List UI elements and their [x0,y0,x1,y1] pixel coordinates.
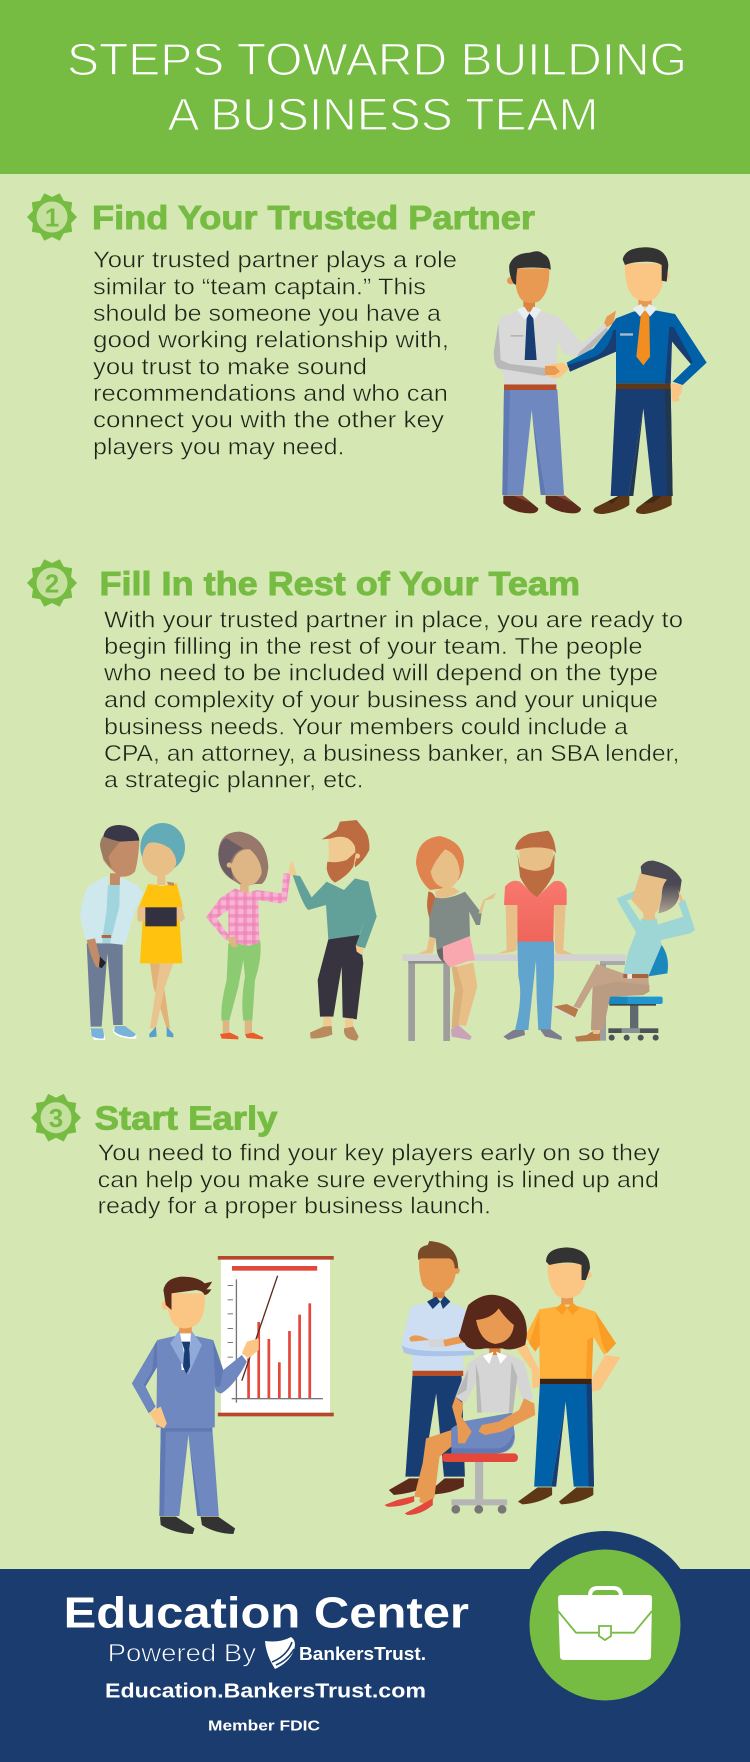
title [67,34,687,140]
heading: step 1: Find Your Trusted Partner [92,199,535,236]
text block: step 3 body: You need to find your key players early on so they [98,1140,661,1166]
title: STEPS TOWARD BUILDING [67,34,687,85]
panel: step 1 [27,193,707,514]
heading: Education Center: Education Center [64,1588,469,1637]
text block: step 2 body: a strategic planner, etc. [104,767,364,793]
text: BankersTrust wordmark: BankersTrust. [299,1644,426,1664]
text block: step 3 body: ready for a proper business launch. [98,1192,491,1218]
text block: step 2 body: begin filling in the rest of your team. The people [104,633,643,659]
icon: Bankers Trust logo shield [265,1637,295,1669]
header banner [0,0,750,174]
woman with ponytail [416,836,496,1040]
text: Member FDIC: Member FDIC [208,1718,321,1734]
text block: step 2 body: and complexity of your business and your unique [104,686,658,712]
illustration: two pairs of colleagues [80,820,377,1041]
illustration: two businessmen shaking hands [494,247,707,514]
right man in orange shirt [517,1247,620,1504]
man in denim jacket [80,825,143,1040]
text block: step 3 body [98,1140,661,1218]
text block: step 2 body: CPA, an attorney, a business banker, an SBA lender, [104,740,679,766]
text block: step 1 body: recommendations and who can [93,380,448,406]
illustration: team at a table [402,831,695,1042]
text block: step 2 body: business needs. Your members could include a [104,713,628,739]
panel: step 2 [27,559,695,1042]
text block: step 1 body: you trust to make sound [93,353,367,379]
bar chart board [218,1256,334,1416]
seated woman on red stool [384,1295,535,1515]
text block: step 2 body: With your trusted partner in place, you are ready to [104,606,683,632]
text block: step 1 body: players you may need. [93,433,344,459]
icon: step 3 badge: 3 [49,1103,63,1133]
table [402,954,626,1041]
illustration: team of three [384,1241,620,1515]
heading: step 3: Start Early [95,1099,278,1136]
text: Powered By: Powered By [108,1640,257,1668]
icon: step 2 badge [27,559,77,607]
footer band [0,1531,750,1762]
icon: step 3 badge [31,1094,81,1142]
text block: step 3 body: can help you make sure everything is lined up and [98,1166,659,1192]
text: website url: Education.BankersTrust.com [105,1680,426,1702]
bearded man in teal sweater [290,820,377,1041]
text block: step 1 body: Your trusted partner plays a role [93,247,457,273]
text block: step 1 body: connect you with the other key [93,407,445,433]
text block: step 1 body [93,247,457,459]
panel: step 3 [31,1094,661,1534]
icon: step 1 badge [27,193,77,241]
heading: step 2: Fill In the Rest of Your Team [100,565,580,602]
man seated on office chair [553,861,695,1042]
left man with folded arms [389,1241,474,1495]
illustration: presenter and bar chart [132,1256,334,1534]
woman in pink plaid shirt [206,832,293,1039]
icon: step 2 badge: 2 [45,568,59,598]
right man [545,247,707,514]
text block: step 1 body: should be someone you have a [93,300,441,326]
woman in yellow dress [137,823,185,1037]
text block: step 2 body [103,606,683,793]
text block: step 1 body: similar to “team captain.” This [93,273,426,299]
presenter [132,1276,278,1534]
text block: step 1 body: good working relationship with, [93,327,449,353]
icon: briefcase medallion [511,1531,699,1719]
icon: step 1 badge: 1 [45,202,59,232]
bearded man in red tee [497,831,573,1040]
text block: step 2 body: who need to be included will depend on the type [103,660,658,686]
title: A BUSINESS TEAM [168,89,598,140]
left man [494,251,616,513]
